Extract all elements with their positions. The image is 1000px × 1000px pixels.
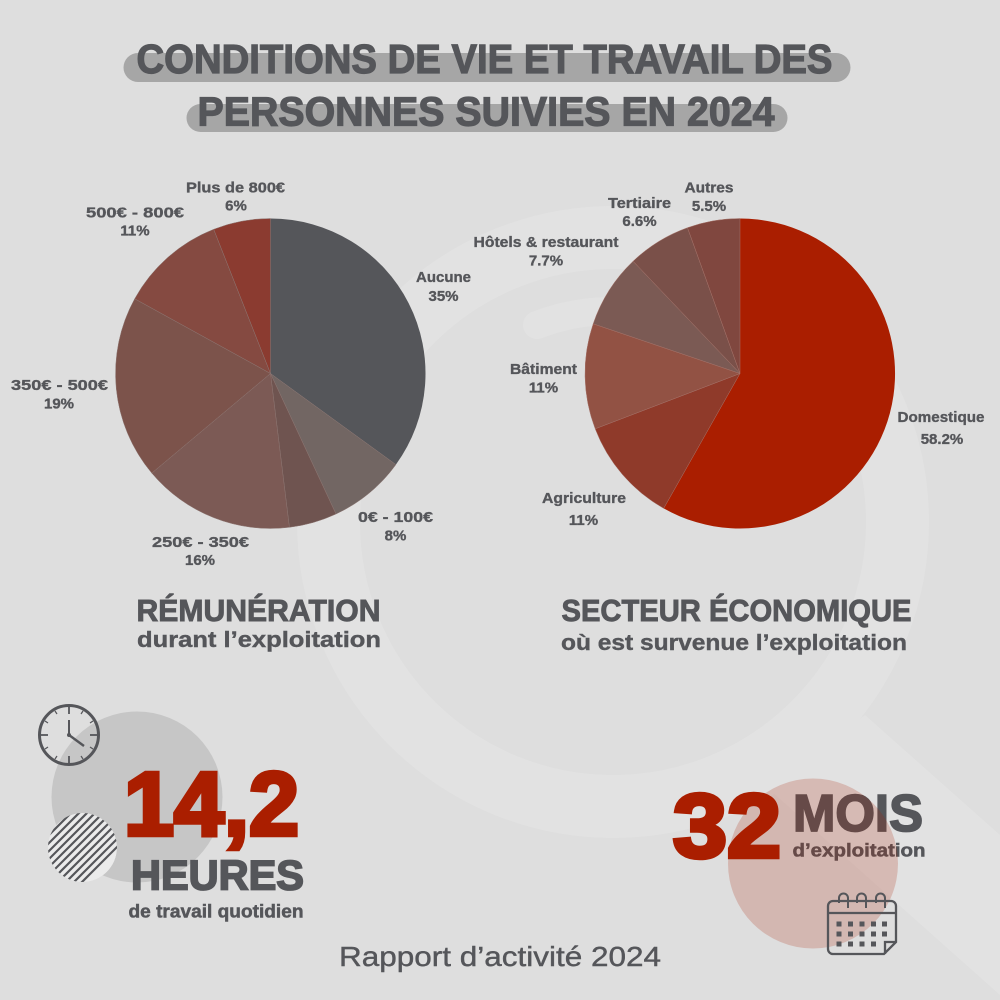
title highlight bars [124, 53, 850, 132]
heading: secteur économique: SECTEUR ÉCONOMIQUE [562, 593, 912, 628]
label: Plus de 800€ [186, 180, 286, 214]
heading: secteur économique: où est survenue l’exploitation [561, 630, 907, 655]
label: Aucune [416, 269, 471, 305]
word: HEURES: HEURES [131, 852, 304, 898]
icon: clock [40, 706, 98, 764]
heading: rémunération: RÉMUNÉRATION [136, 593, 380, 628]
label: 250€ - 350€: 250€ - 350€ [152, 534, 250, 551]
label: Agriculture: 11% [569, 512, 598, 529]
label: 0€ - 100€ [358, 509, 434, 544]
label: 500€ - 800€ [86, 204, 185, 240]
label: 0€ - 100€: 8% [385, 528, 406, 544]
number: 14,2: 14,2 [124, 755, 299, 855]
label: 350€ - 500€: 19% [44, 396, 74, 412]
label: 250€ - 350€ [152, 534, 250, 569]
label: Agriculture: Agriculture [542, 490, 626, 507]
label: Bâtiment [510, 361, 577, 396]
title line 2: PERSONNES SUIVIES EN 2024 [198, 88, 775, 134]
label: Autres [684, 180, 734, 215]
label: Autres: Autres [684, 180, 734, 196]
heading: rémunération [136, 593, 381, 652]
title [124, 36, 850, 134]
label: Plus de 800€: Plus de 800€ [186, 180, 286, 196]
stat: 32 mois [673, 777, 926, 877]
caption: de travail quotidien: de travail quotidien [128, 900, 304, 922]
decorative gray circle [52, 712, 222, 882]
title line 1: CONDITIONS DE VIE ET TRAVAIL DES [136, 36, 832, 82]
label: Tertiaire [608, 195, 671, 230]
label: 500€ - 800€: 500€ - 800€ [86, 204, 185, 222]
label: 0€ - 100€: 0€ - 100€ [358, 509, 434, 526]
label: Tertiaire: 6.6% [622, 213, 657, 230]
decorative red circle [728, 778, 898, 948]
label: Autres: 5.5% [692, 198, 726, 215]
label: Hôtels & restaurant: 7.7% [529, 252, 563, 270]
heading: rémunération: durant l’exploitation [137, 627, 381, 652]
label: 500€ - 800€: 11% [120, 222, 150, 240]
label: Hôtels & restaurant [474, 234, 618, 270]
pie chart: secteur économique [585, 218, 895, 528]
striped circle [48, 813, 117, 882]
label: 350€ - 500€: 350€ - 500€ [11, 377, 109, 394]
heading: secteur économique [561, 593, 912, 655]
word: MOIS: MOIS [793, 785, 923, 843]
label: Tertiaire: Tertiaire [608, 195, 671, 212]
caption: d'exploitation: d’exploitation [792, 840, 926, 860]
label: Hôtels & restaurant: Hôtels & restaurant [474, 234, 618, 251]
number: 32: 32 [673, 777, 781, 877]
pie chart: rémunération [116, 218, 425, 528]
label: Bâtiment: 11% [529, 380, 558, 396]
label: Agriculture [542, 490, 626, 529]
footer: Rapport d’activité 2024 [339, 941, 661, 972]
label: Bâtiment: Bâtiment [510, 361, 577, 378]
pie labels: secteur économique [474, 180, 984, 529]
magnifying glass watermark [328, 238, 1000, 995]
label: Domestique [898, 409, 984, 448]
label: Domestique: Domestique [898, 409, 984, 426]
icon: calendar [828, 894, 896, 954]
pie labels: rémunération [11, 180, 471, 569]
label: Aucune: 35% [428, 288, 459, 305]
label: 350€ - 500€ [11, 377, 109, 412]
label: Aucune: Aucune [416, 269, 471, 286]
label: Plus de 800€: 6% [225, 198, 247, 214]
label: Domestique: 58.2% [921, 431, 963, 448]
stat: 14,2 heures [124, 755, 304, 922]
label: 250€ - 350€: 16% [185, 552, 215, 569]
